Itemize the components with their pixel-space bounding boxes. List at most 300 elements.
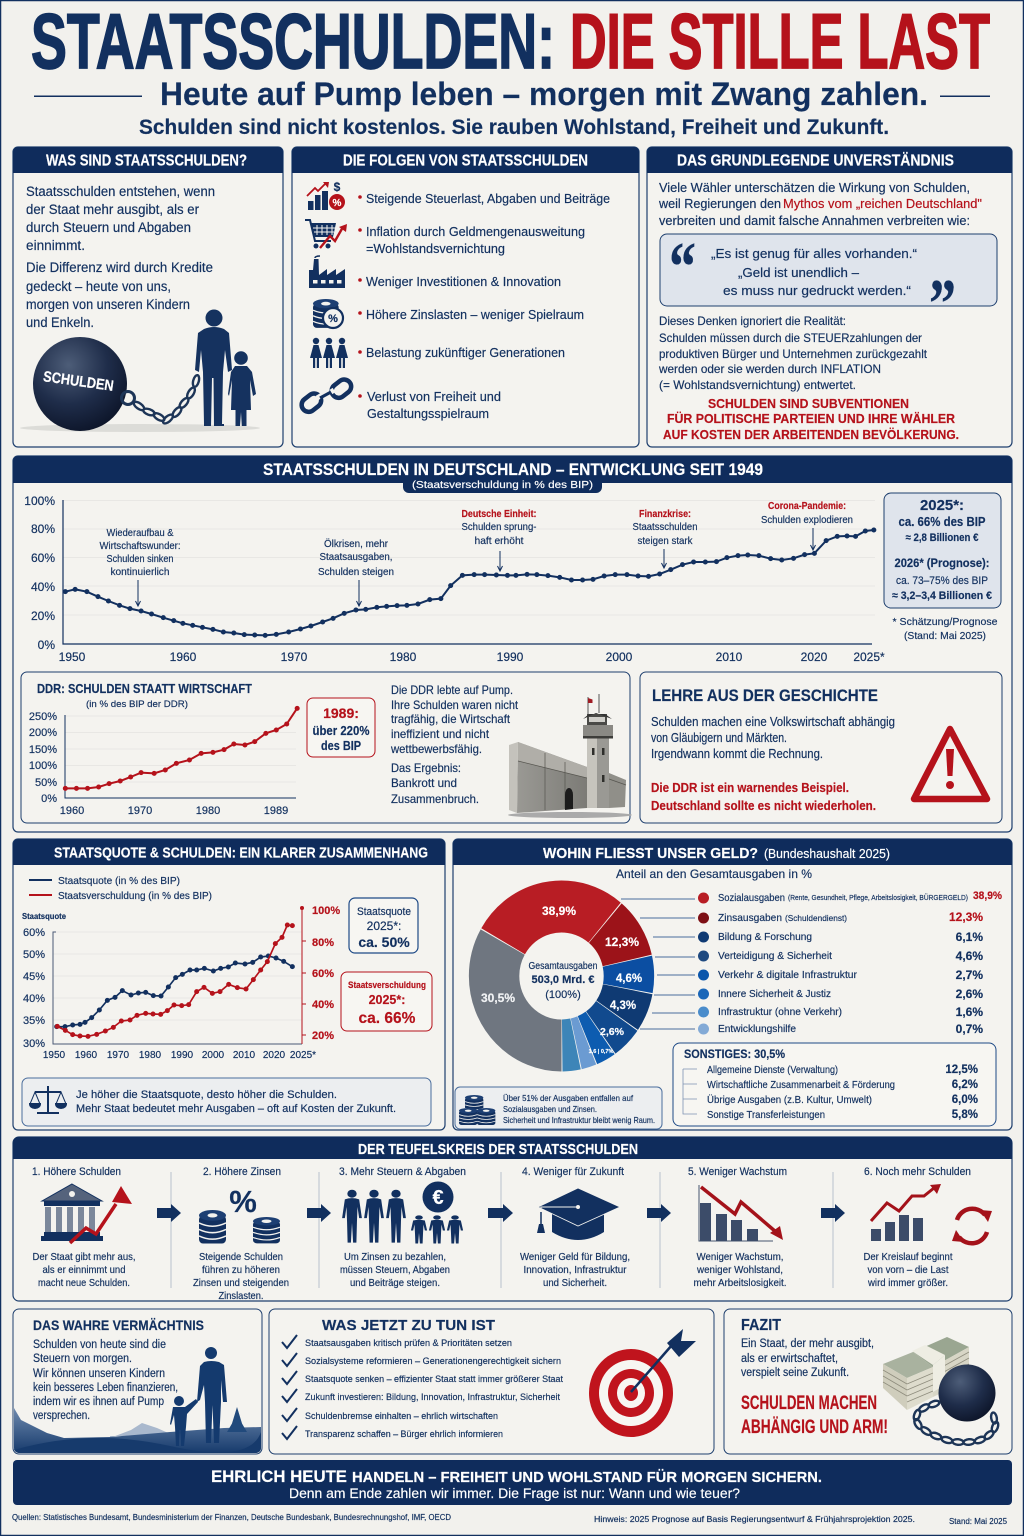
step 5: 5. Weniger Wachstum	[688, 1166, 787, 1178]
text block: durch Steuern und Abgaben	[26, 220, 191, 235]
chart: staatsquote und verschuldung: 60%	[312, 968, 334, 980]
annotation: deutsche einheit: Schulden sprung-	[462, 521, 537, 533]
callout: subventionen	[663, 397, 959, 442]
icon: factory	[309, 256, 345, 288]
callout: quote: „Es ist genug für alles vorhanden.“	[711, 246, 917, 261]
bullet: zinslasten: Höhere Zinslasten – weniger Spielraum	[366, 307, 584, 322]
footer: stand: Stand: Mai 2025	[949, 1517, 1008, 1526]
text block: verspielt seine Zukunft.	[741, 1367, 849, 1379]
arrow 2	[307, 1204, 331, 1222]
line chart: schuldenquote: 2000	[606, 650, 633, 664]
line chart: ddr schulden: 0%	[41, 793, 57, 805]
icon: three persons	[310, 338, 348, 368]
donut chart: 4,6%	[616, 973, 642, 985]
text block: ddr: ineffizient und nicht	[391, 727, 490, 741]
text block: Irgendwann kommt die Rechnung.	[651, 747, 823, 761]
text block	[741, 1338, 874, 1379]
step 4: 4. Weniger für Zukunft	[522, 1166, 624, 1178]
annotation: deutsche einheit: haft erhöht	[474, 535, 524, 547]
callout: 2025 und 2026: 2026* (Prognose):	[894, 556, 990, 570]
checklist: Staatsquote senken – effizienter Staat statt immer größerer Staat	[305, 1374, 563, 1385]
callout: staatsquote 2025: Staatsquote	[357, 906, 411, 918]
text block: kein besseres Leben finanzieren,	[33, 1382, 178, 1394]
donut chart: 38,9%	[542, 904, 576, 918]
banner: appell: EHRLICH HEUTE	[211, 1467, 347, 1486]
banner: appell: HANDELN – FREIHEIT UND WOHLSTAND FÜR MORGEN SICHERN.	[352, 1469, 822, 1486]
callout: quote: “	[669, 229, 696, 306]
legend rows: budget items: Innere Sicherheit & Justiz	[718, 988, 831, 1000]
legend row: sozialausgaben: 38,9%	[973, 890, 1002, 902]
callout: staatsverschuldung 2025	[341, 972, 432, 1031]
chart: staatsquote und verschuldung: 2020	[263, 1050, 286, 1061]
legend row: sozialausgaben: Sozialausgaben	[718, 892, 785, 904]
callout: ueber 51 prozent: Sozialausgaben und Zinsen.	[503, 1104, 597, 1114]
chart: staatsquote und verschuldung: 40%	[23, 993, 45, 1005]
line chart: schuldenquote: 40%	[31, 580, 55, 594]
icon: scales	[30, 1086, 66, 1113]
chart: staatsquote und verschuldung: 1970	[107, 1050, 130, 1061]
line chart: schuldenquote: 60%	[31, 551, 55, 565]
annotation: wiederaufbau: Schulden sinken	[106, 553, 174, 565]
chart: staatsquote und verschuldung: 20%	[312, 1030, 334, 1042]
text block: Schulden machen eine Volkswirtschaft abhängig	[651, 715, 895, 729]
panel: sonstiges: Übrige Ausgaben (z.B. Kultur, Umwelt)	[707, 1094, 872, 1106]
line chart: schuldenquote: 1980	[390, 650, 417, 664]
legend: Staatsverschuldung (in % des BIP)	[58, 890, 212, 902]
line chart: schuldenquote: 1970	[281, 650, 308, 664]
step 3: und Beiträge steigen.	[350, 1277, 440, 1289]
icon: percent and coins: %	[229, 1184, 257, 1219]
panel: sonstiges: 12,5%	[945, 1064, 978, 1076]
step 3	[339, 1166, 466, 1289]
text block: von Gläubigern und Märkten.	[651, 731, 787, 745]
panel: lehre aus der geschichte	[640, 672, 1002, 823]
annotation: finanzkrise: steigen stark	[638, 535, 693, 547]
bullet: freiheit	[358, 389, 501, 421]
icon: falling bars	[699, 1185, 783, 1241]
callout: abhaengig und arm: ABHÄNGIG UND ARM!	[741, 1417, 888, 1438]
chart: staatsquote und verschuldung: 1960	[75, 1050, 98, 1061]
legend rows: budget items: 4,6%	[956, 949, 983, 963]
heading: WAS JETZT ZU TUN IST	[322, 1317, 495, 1334]
tagline: Schulden sind nicht kostenlos. Sie rauben Wohlstand, Freiheit und Zukunft.	[139, 116, 889, 139]
line chart: schuldenquote: 100%	[24, 494, 55, 508]
line chart: ddr schulden	[29, 708, 297, 817]
donut chart: 12,3%	[605, 935, 639, 949]
annotation: wiederaufbau	[100, 527, 180, 606]
legend row: zinsausgaben: (Schuldendienst)	[785, 913, 847, 923]
text block: ddr: Die DDR lebte auf Pump.	[391, 683, 513, 697]
step 1	[32, 1166, 136, 1289]
checklist: Schuldenbremse einhalten – ehrlich wirtschaften	[305, 1411, 498, 1422]
text block: Wir können unseren Kindern	[33, 1368, 165, 1380]
line chart: schuldenquote: 1950	[59, 650, 86, 664]
callout: 2025 und 2026: 2025*:	[920, 497, 964, 514]
annotation: wiederaufbau: kontinuierlich	[110, 566, 170, 578]
line chart: schuldenquote: 1960	[170, 650, 197, 664]
text block: ddr: Ihre Schulden waren nicht	[391, 698, 519, 712]
panel: fazit	[724, 1309, 1012, 1454]
legend rows: budget items: Verteidigung & Sicherheit	[718, 950, 832, 962]
checklist: Sozialsysteme reformieren – Generationengerechtigkeit sichern	[305, 1356, 561, 1367]
annotation: wiederaufbau: Wirtschaftswunder:	[100, 540, 180, 552]
chart: staatsquote und verschuldung: Staatsquote	[22, 911, 66, 921]
chart: staatsquote und verschuldung: 60%	[23, 927, 45, 939]
line chart: ddr schulden: 200%	[29, 727, 57, 739]
text block: warnung: Die DDR ist ein warnendes Beispiel.	[651, 781, 849, 795]
chart: staatsquote und verschuldung: 2010	[233, 1050, 256, 1061]
callout: subventionen: AUF KOSTEN DER ARBEITENDEN BEVÖLKERUNG.	[663, 427, 959, 442]
line chart: schuldenquote: 0%	[38, 638, 55, 652]
line chart: schuldenquote: 2010	[716, 650, 743, 664]
icon: bank with rising arrow	[41, 1184, 132, 1243]
icon: coins with percent: %	[328, 313, 338, 325]
legend rows: budget items: 1,6%	[956, 1005, 983, 1019]
callout: 1989	[307, 698, 375, 757]
line chart: ddr schulden: 150%	[29, 744, 57, 756]
annotation: oelkrisen	[318, 538, 394, 606]
panel: die folgen von staatsschulden	[292, 147, 639, 447]
panel: sonstiges	[673, 1043, 996, 1126]
callout: fazit staatsquote: Je höher die Staatsquote, desto höher die Schulden.	[76, 1089, 337, 1101]
text block: intro	[658, 181, 982, 228]
callout: 2025 und 2026: ca. 66% des BIP	[898, 515, 986, 529]
step 5: Weniger Wachstum,	[696, 1251, 784, 1263]
arrow 1	[157, 1204, 181, 1222]
callout: ueber 51 prozent	[455, 1087, 662, 1129]
chart: staatsquote und verschuldung: 40%	[312, 999, 334, 1011]
annotation: deutsche einheit	[462, 508, 537, 571]
annotation: wiederaufbau: Wiederaufbau &	[106, 527, 174, 539]
text block: indem wir es ihnen auf Pump	[33, 1396, 164, 1408]
legend rows: budget items: 2,6%	[956, 987, 983, 1001]
line chart: ddr schulden: 250%	[29, 711, 57, 723]
step 2: Zinsen und steigenden	[193, 1277, 289, 1289]
text block: realitaet: Dieses Denken ignoriert die Realität:	[659, 314, 846, 328]
arrow 4	[647, 1204, 671, 1222]
text block: gedeckt – heute von uns,	[26, 279, 171, 294]
callout: 2025 und 2026: ≈ 3,2–3,4 Billionen €	[892, 590, 992, 602]
footnote: schaetzung: (Stand: Mai 2025)	[904, 630, 986, 642]
step 1: Der Staat gibt mehr aus,	[32, 1251, 136, 1263]
annotation: oelkrisen: Staatsausgaben,	[320, 551, 392, 563]
icon: graduation cap	[537, 1188, 620, 1240]
legend rows: budget items	[698, 930, 983, 1036]
legend row: sozialausgaben: (Rente, Gesundheit, Pflege, Arbeitslosigkeit, BÜRGERGELD)	[788, 893, 968, 902]
step 3: 3. Mehr Steuern & Abgaben	[339, 1166, 466, 1178]
legend: leader lines	[621, 899, 695, 1029]
text block: der Staat mehr ausgibt, als er	[26, 202, 199, 217]
donut chart: 4,3%	[610, 1000, 636, 1012]
legend rows: budget items: Bildung & Forschung	[718, 931, 812, 943]
step 2: Steigende Schulden	[199, 1251, 283, 1263]
callout: subventionen: SCHULDEN SIND SUBVENTIONEN	[708, 397, 909, 411]
callout: 2025 und 2026: ca. 73–75% des BIP	[896, 575, 988, 587]
donut chart: Gesamtausgaben	[528, 961, 598, 972]
step 3: müssen Steuern, Abgaben	[340, 1264, 450, 1276]
checklist: Staatsausgaben kritisch prüfen & Prioritäten setzen	[305, 1338, 512, 1349]
chart subtitle: Anteil an den Gesamtausgaben in %	[616, 867, 812, 881]
chart: staatsquote und verschuldung: 45%	[23, 971, 45, 983]
icon: coins with percent	[313, 299, 343, 328]
text block: als er erwirtschaftet,	[741, 1353, 838, 1365]
line chart: ddr schulden: 100%	[29, 760, 57, 772]
text block: realitaet: werden oder sie werden durch INFLATION	[658, 362, 881, 376]
subheading pill: (Staatsverschuldung in % des BIP)	[412, 479, 593, 491]
text block: realitaet: Schulden müssen durch die STEUERzahlungen der	[659, 331, 922, 345]
heading: WAS SIND STAATSSCHULDEN?	[46, 152, 247, 170]
legend rows: budget items: Verkehr & digitale Infrastruktur	[718, 969, 857, 981]
line chart: schuldenquote: 2020	[801, 650, 828, 664]
panel: sonstiges: Wirtschaftliche Zusammenarbeit & Förderung	[707, 1079, 895, 1091]
annotation: oelkrisen: Ölkrisen, mehr	[324, 538, 388, 550]
panel: sonstiges: Sonstige Transferleistungen	[707, 1109, 825, 1121]
callout: 1989: über 220%	[312, 723, 370, 738]
step 1: macht neue Schulden.	[38, 1277, 130, 1289]
bullet: inflation	[358, 224, 585, 256]
text block: einnimmt.	[26, 238, 85, 253]
annotation: corona: Corona-Pandemie:	[768, 500, 846, 512]
checklist	[282, 1335, 563, 1440]
line chart: ddr schulden: 1980	[196, 805, 220, 817]
footer: hinweis: Hinweis: 2025 Prognose auf Basis Regierungsentwurf & Frühjahrsprojektion 2025.	[594, 1514, 915, 1524]
step 2	[193, 1166, 289, 1302]
line chart: ddr schulden: 50%	[35, 777, 57, 789]
callout: staatsquote 2025	[349, 898, 418, 953]
panel: sonstiges: 6,2%	[952, 1079, 978, 1091]
icon: mauer mit wachturm	[508, 694, 632, 818]
text block: warnung	[651, 781, 876, 813]
bullet: freiheit: Gestaltungsspielraum	[367, 406, 489, 421]
text block: ddr: Das Ergebnis:	[391, 761, 461, 775]
legend: Staatsquote (in % des BIP)	[58, 875, 180, 887]
donut chart: 30,5%	[481, 991, 515, 1005]
text block: warnung: Deutschland sollte es nicht wiederholen.	[651, 799, 876, 813]
line chart: ddr schulden: 1989	[264, 805, 288, 817]
step 6	[864, 1166, 992, 1289]
bullet: inflation: =Wohlstandsvernichtung	[366, 241, 505, 256]
checklist: Zukunft investieren: Bildung, Innovation, Infrastruktur, Sicherheit	[305, 1392, 560, 1403]
text block	[33, 1339, 178, 1422]
chart: staatsquote und verschuldung: 50%	[23, 949, 45, 961]
icon: ball and chain with family	[20, 310, 260, 432]
icon: target with arrow	[589, 1329, 696, 1437]
donut chart: 1,6 | 0,7%	[589, 1049, 613, 1055]
donut chart: 503,0 Mrd. €	[532, 974, 594, 986]
icon: rising taxes: $	[334, 180, 341, 194]
panel: staatsschulden in deutschland	[12, 456, 1012, 1526]
heading: DAS WAHRE VERMÄCHTNIS	[33, 1317, 204, 1333]
step 4: Weniger Geld für Bildung,	[520, 1251, 630, 1263]
chart: staatsquote und verschuldung: 35%	[23, 1015, 45, 1027]
text block: realitaet: (= Wohlstandsvernichtung) entwertet.	[659, 378, 856, 392]
banner: appell	[13, 1460, 1012, 1505]
callout: staatsverschuldung 2025: Staatsverschuldung	[348, 980, 426, 991]
text block: versprechen.	[33, 1410, 90, 1422]
text block: ddr: Bankrott und	[391, 776, 457, 790]
bullet: inflation: Inflation durch Geldmengenausweitung	[366, 224, 585, 239]
text block: realitaet	[658, 314, 928, 392]
icon: broken chain	[299, 377, 354, 415]
text block: intro: verbreiten und damit falsche Annahmen verbreiten wie:	[659, 214, 970, 228]
panel: sonstiges: Allgemeine Dienste (Verwaltung)	[707, 1064, 838, 1076]
heading: DIE FOLGEN VON STAATSSCHULDEN	[343, 152, 588, 170]
callout: quote	[660, 229, 997, 343]
callout: subventionen: FÜR POLITISCHE PARTEIEN UND IHRE WÄHLER	[667, 411, 955, 426]
bullet: steuerlast: Steigende Steuerlast, Abgaben und Beiträge	[366, 191, 610, 206]
step 5	[688, 1166, 787, 1289]
icon: shopping cart	[305, 220, 347, 248]
legend row: zinsausgaben	[698, 910, 983, 924]
step 6: 6. Noch mehr Schulden	[864, 1166, 971, 1178]
bullet: freiheit: Verlust von Freiheit und	[367, 389, 501, 404]
line chart: schuldenquote: 2025*	[853, 650, 885, 664]
icon: rising taxes: %	[333, 198, 342, 209]
annotation: corona	[761, 500, 853, 550]
callout: abhaengig und arm	[741, 1393, 888, 1438]
annotation: corona: Schulden explodieren	[761, 514, 853, 526]
step 4: Innovation, Infrastruktur	[524, 1264, 627, 1276]
chart: staatsquote und verschuldung: 1980	[139, 1050, 162, 1061]
legend rows: budget items: Entwicklungshilfe	[718, 1023, 796, 1035]
text block: intro: Viele Wähler unterschätzen die Wirkung von Schulden,	[659, 181, 970, 195]
panel: sonstiges: 5,8%	[952, 1109, 978, 1121]
footer: quellen: Quellen: Statistisches Bundesamt, Bundesministerium der Finanzen, Deutsche Bundesbank, Bundesrechnungshof, IMF, OECD	[12, 1512, 451, 1522]
chart: staatsquote und verschuldung: 2000	[202, 1050, 225, 1061]
icon: money and ball	[883, 1337, 1000, 1445]
annotation: finanzkrise: Finanzkrise:	[639, 508, 691, 520]
heading: STAATSQUOTE & SCHULDEN: EIN KLARER ZUSAMMENHANG	[54, 844, 428, 862]
donut chart: (100%)	[545, 989, 581, 1001]
callout: quote: ”	[929, 266, 956, 343]
text block: Schulden von heute sind die	[33, 1339, 166, 1351]
text block: morgen von unseren Kindern	[26, 297, 190, 312]
heading: DER TEUFELSKREIS DER STAATSSCHULDEN	[358, 1142, 638, 1158]
step 2: führen zu höheren	[202, 1264, 280, 1276]
panel: sonstiges: SONSTIGES: 30,5%	[684, 1049, 785, 1061]
step 1: als er einnimmt und	[42, 1264, 126, 1276]
annotation: finanzkrise: Staatsschulden	[632, 521, 698, 533]
step 2: Zinslasten.	[218, 1290, 264, 1302]
callout: staatsverschuldung 2025: 2025*:	[369, 993, 405, 1007]
callout: abhaengig und arm: SCHULDEN MACHEN	[741, 1393, 877, 1414]
heading	[543, 845, 890, 862]
banner: appell: Denn am Ende zahlen wir immer. Die Frage ist nur: Wann und wie teuer?	[289, 1486, 740, 1501]
callout: ueber 51 prozent: Sicherheit und Infrastruktur bleibt wenig Raum.	[503, 1115, 655, 1125]
step 3: Um Zinsen zu bezahlen,	[344, 1251, 446, 1263]
callout: 1989: des BIP	[321, 738, 361, 753]
chart: staatsquote und verschuldung	[22, 905, 340, 1061]
text block: ddr: Zusammenbruch.	[391, 792, 479, 806]
bullet: generationen: Belastung zukünftiger Generationen	[366, 345, 565, 360]
donut chart: 2,6%	[600, 1026, 625, 1038]
icon: family and euro: €	[432, 1187, 444, 1209]
line chart: schuldenquote: 80%	[31, 522, 55, 536]
chart: staatsquote und verschuldung: 100%	[312, 905, 340, 917]
annotation: finanzkrise	[632, 508, 698, 568]
text block: intro: weil Regierungen den	[658, 197, 781, 211]
step 4	[520, 1166, 630, 1289]
callout: 1989: 1989:	[323, 705, 359, 721]
line chart: schuldenquote: 20%	[31, 609, 55, 623]
panel: teufelskreis	[13, 1137, 1012, 1302]
heading: WOHIN FLIESST UNSER GELD?	[543, 845, 758, 862]
icon: rising taxes	[307, 180, 345, 210]
text block: Staatsschulden entstehen, wenn	[26, 184, 215, 199]
legend	[29, 875, 212, 902]
callout: fazit staatsquote: Mehr Staat bedeutet mehr Ausgaben – oft auf Kosten der Zukunft.	[76, 1103, 396, 1115]
step 5: weniger Wohlstand,	[696, 1264, 783, 1276]
legend rows: budget items: 6,1%	[956, 930, 983, 944]
heading: FAZIT	[741, 1317, 781, 1334]
legend row: sozialausgaben	[698, 890, 1002, 904]
donut chart	[466, 878, 657, 1074]
subheading pill	[403, 479, 602, 493]
callout: fazit staatsquote	[22, 1078, 431, 1126]
panel: das grundlegende unverstaendnis	[647, 147, 1012, 447]
legend rows: budget items: 2,7%	[956, 968, 983, 982]
checklist: Transparenz schaffen – Bürger ehrlich informieren	[305, 1429, 503, 1440]
callout: staatsquote 2025: 2025*:	[367, 919, 401, 933]
text block: ddr: wettbewerbsfähig.	[390, 742, 482, 756]
annotation: oelkrisen: Schulden steigen	[318, 566, 394, 578]
chart: staatsquote und verschuldung: 30%	[23, 1038, 45, 1050]
callout: ueber 51 prozent: Über 51% der Ausgaben entfallen auf	[503, 1093, 634, 1103]
heading: STAATSSCHULDEN IN DEUTSCHLAND – ENTWICKLUNG SEIT 1949	[263, 461, 763, 479]
chart: staatsquote und verschuldung: 1990	[171, 1050, 194, 1061]
subtitle: Heute auf Pump leben – morgen mit Zwang zahlen.	[160, 76, 928, 112]
callout: staatsquote 2025: ca. 50%	[358, 934, 410, 950]
chart subtitle: (in % des BIP der DDR)	[86, 699, 188, 710]
panel: wohin fliesst unser geld	[453, 839, 1012, 1130]
panel: was jetzt zu tun ist	[269, 1309, 714, 1454]
annotation: deutsche einheit: Deutsche Einheit:	[462, 508, 536, 520]
footnote: schaetzung: * Schätzung/Prognose	[892, 616, 998, 628]
legend row: zinsausgaben: 12,3%	[949, 910, 983, 924]
step 6: Der Kreislauf beginnt	[864, 1251, 953, 1263]
callout: 2025 und 2026	[884, 493, 1001, 608]
text block: realitaet: produktiven Bürger und Unternehmen zurückgezahlt	[659, 347, 928, 361]
panel: ddr	[21, 672, 632, 823]
text block: ddr	[390, 683, 519, 806]
step 6: von vorn – die Last	[868, 1264, 949, 1276]
step 5: mehr Arbeitslosigkeit.	[694, 1277, 786, 1289]
panel: staatsquote und schulden	[13, 839, 445, 1130]
callout: 2025 und 2026: ≈ 2,8 Billionen €	[906, 532, 978, 544]
legend rows: budget items: Infrastruktur (ohne Verkehr)	[718, 1006, 842, 1018]
text block: Die Differenz wird durch Kredite	[26, 260, 213, 275]
text block: ddr: tragfähig, die Wirtschaft	[391, 712, 511, 726]
footnote: schaetzung	[892, 616, 998, 642]
heading: DDR: SCHULDEN STAATT WIRTSCHAFT	[37, 682, 252, 696]
panel: was sind staatsschulden	[13, 147, 283, 447]
icon: warning triangle	[914, 729, 987, 799]
line chart: ddr schulden: 1960	[60, 805, 84, 817]
text block: Ein Staat, der mehr ausgibt,	[741, 1338, 874, 1350]
chart: staatsquote und verschuldung: 80%	[312, 937, 334, 949]
line chart: ddr schulden: 1970	[128, 805, 152, 817]
landscape with silhouettes	[14, 1347, 261, 1453]
step 1: 1. Höhere Schulden	[32, 1166, 121, 1178]
legend row: zinsausgaben: Zinsausgaben	[718, 912, 782, 924]
text block: Steuern von morgen.	[33, 1353, 132, 1365]
heading: LEHRE AUS DER GESCHICHTE	[652, 686, 878, 705]
text block: und Enkeln.	[26, 315, 94, 330]
text block: intro: Mythos vom „reichen Deutschland"	[783, 197, 982, 211]
step 2: 2. Höhere Zinsen	[203, 1166, 281, 1178]
arrow 5	[821, 1204, 845, 1222]
arrow 3	[488, 1204, 513, 1222]
